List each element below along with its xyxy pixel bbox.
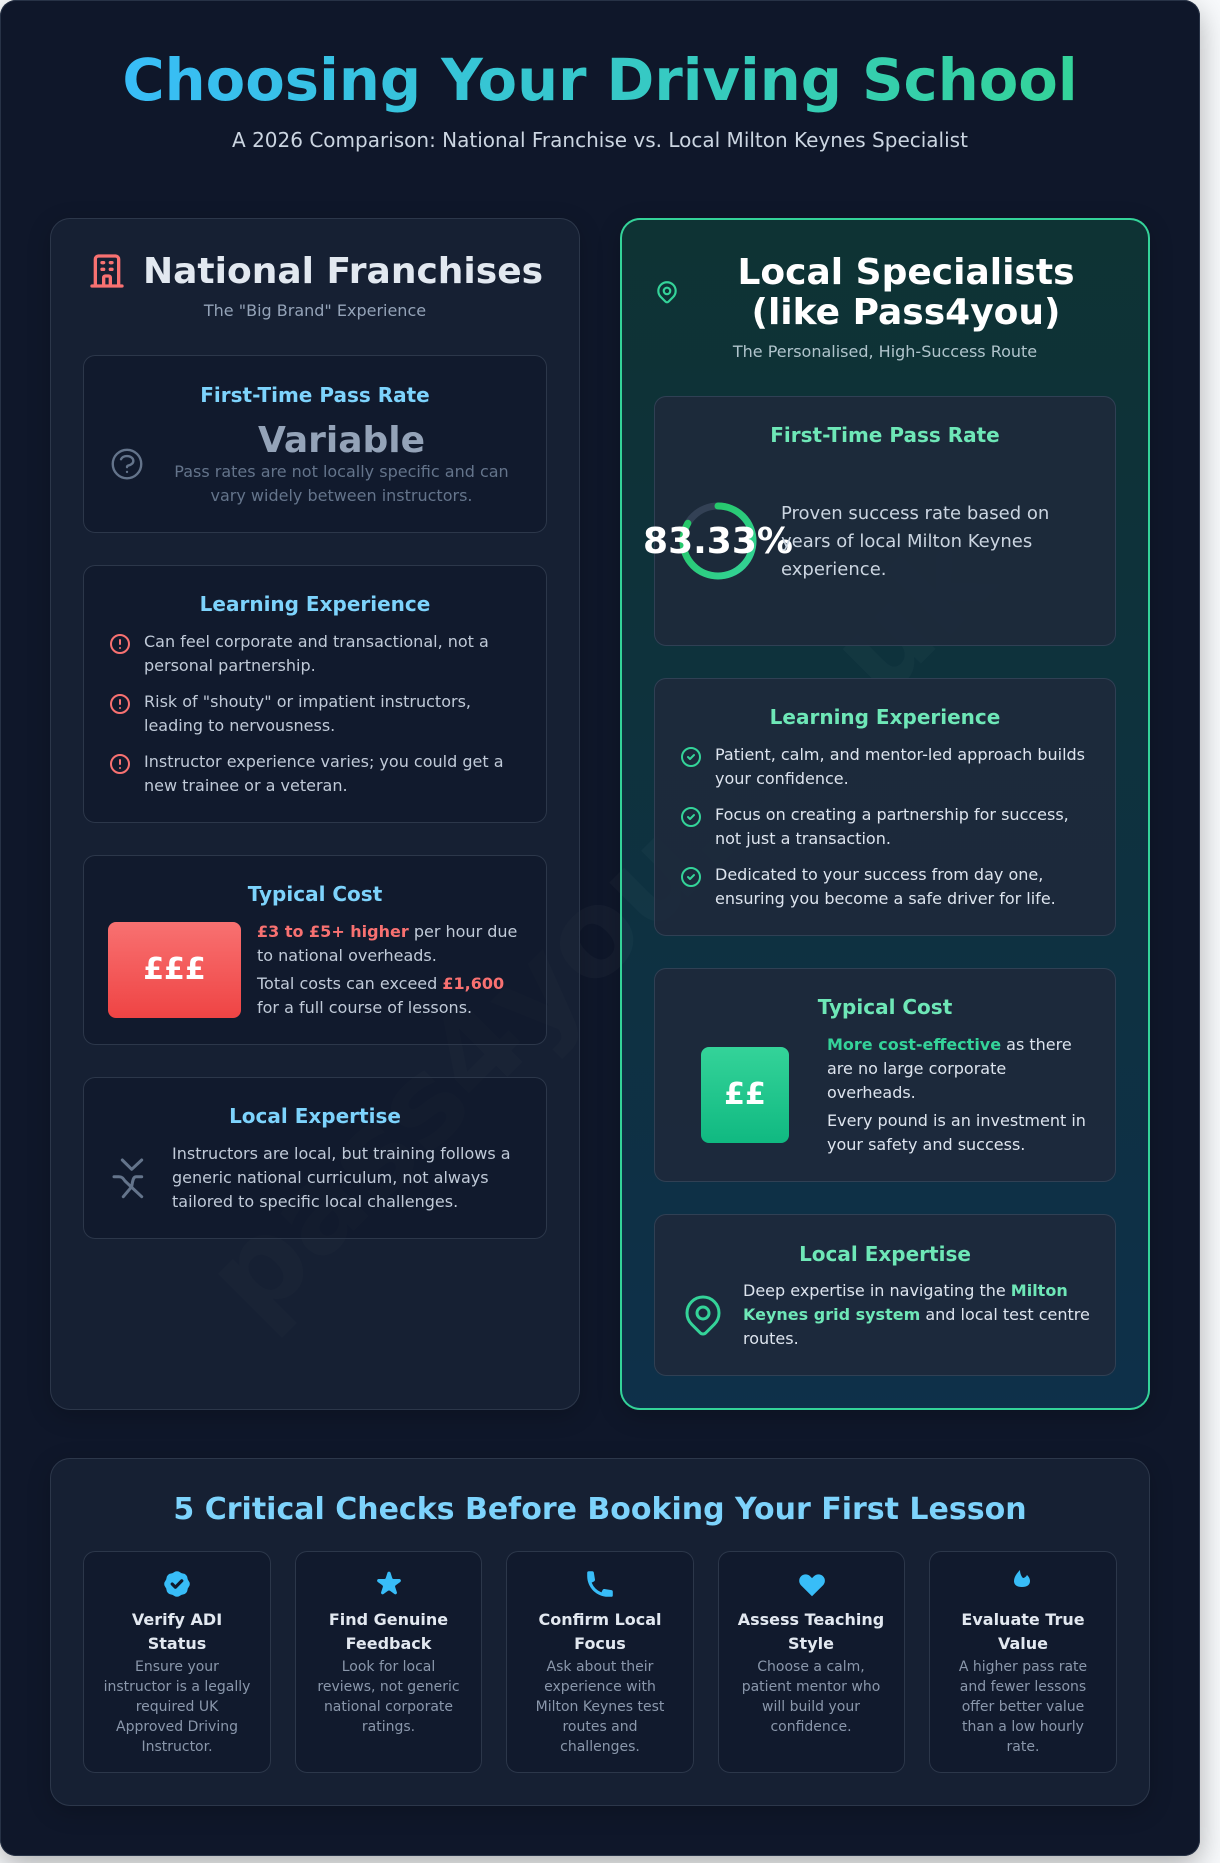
check: verify ADI status [83, 1551, 271, 1773]
point 3: Dedicated to your success from day one, [715, 865, 1043, 884]
price badge: ££ [724, 1077, 766, 1112]
point 3 [144, 752, 504, 795]
subheading: The Personalised, High-Success Route [733, 342, 1037, 360]
heading: national franchises: National Franchises [143, 251, 543, 292]
point 2: leading to nervousness. [144, 716, 335, 735]
check heading: Confirm Local [538, 1610, 662, 1628]
check text [317, 1659, 460, 1735]
icon: broken route [112, 1158, 144, 1198]
description: routes. [743, 1329, 799, 1348]
cost text 1: are no large corporate [827, 1059, 1006, 1078]
section heading: 5 Critical Checks Before Booking Your First Lesson [173, 1492, 1027, 1527]
check text: Ensure your [135, 1659, 219, 1675]
point 1 [715, 745, 1085, 788]
heading: local specialists: (like Pass4you) [752, 292, 1060, 333]
check text: rate. [1007, 1739, 1039, 1755]
check heading: Verify ADI [132, 1610, 222, 1628]
card heading: Typical Cost [818, 995, 952, 1019]
cost text 2 [256, 974, 504, 1017]
card heading: First-Time Pass Rate [200, 383, 430, 407]
card: local expertise [654, 1214, 1116, 1376]
check heading [738, 1610, 884, 1652]
icon: star [377, 1572, 401, 1594]
icon: office building [90, 254, 124, 288]
price badge: £££ [143, 952, 206, 987]
check text [104, 1659, 250, 1755]
description: Instructors are local, but training follows a [172, 1144, 511, 1163]
check text: Instructor. [141, 1739, 213, 1755]
icon: question mark [112, 448, 142, 480]
icon: warning 2 [110, 694, 130, 714]
card: first-time pass rate [83, 355, 547, 533]
point 3 [715, 865, 1056, 908]
icon: check 1 [681, 747, 701, 767]
cost text 1 [257, 922, 517, 965]
description: Keynes grid system and local test centre [743, 1305, 1090, 1324]
description: Proven success rate based on [781, 503, 1049, 524]
card heading: Learning Experience [200, 592, 430, 616]
check text [929, 1657, 1117, 1757]
watermark: pass4you.co.uk [180, 507, 1020, 1347]
description [743, 1281, 1090, 1348]
check text: experience with [544, 1679, 656, 1695]
check: assess teaching style [718, 1551, 904, 1773]
cost text 1: £3 to £5+ higher per hour due [257, 922, 517, 941]
subtitle: A 2026 Comparison: National Franchise vs. Local Milton Keynes Specialist [232, 128, 968, 152]
cost text 2: for a full course of lessons. [257, 998, 472, 1017]
heading: local specialists [737, 252, 1074, 333]
description: experience. [781, 559, 886, 580]
point 3: ensuring you become a safe driver for life. [715, 889, 1056, 908]
point 2: Focus on creating a partnership for success, [715, 805, 1069, 824]
point 1: personal partnership. [144, 656, 316, 675]
card: typical cost [83, 855, 547, 1045]
check heading [538, 1610, 662, 1652]
point 1: Can feel corporate and transactional, not a [144, 632, 489, 651]
panel: national franchises [50, 218, 580, 1410]
cost text 1 [827, 1035, 1072, 1102]
card: learning experience [654, 678, 1116, 936]
heading: local specialists: Local Specialists [737, 252, 1074, 293]
panel: local specialists [620, 218, 1150, 1410]
card heading: Local Expertise [229, 1104, 401, 1128]
check heading: Status [148, 1634, 206, 1652]
point 1: your confidence. [715, 769, 849, 788]
check: find genuine feedback [295, 1551, 482, 1773]
value: variable: Variable [258, 420, 425, 461]
card: first-time pass rate [654, 396, 1116, 646]
check text: instructor is a legally [104, 1679, 250, 1695]
check text: offer better value [962, 1699, 1084, 1715]
check text: reviews, not generic [317, 1679, 460, 1695]
check text [536, 1659, 664, 1755]
cost text 2: Total costs can exceed £1,600 [257, 974, 504, 993]
donut chart: 83.33% [680, 502, 756, 580]
check text: confidence. [770, 1719, 852, 1735]
check heading: Evaluate True [961, 1610, 1085, 1628]
price badge [108, 922, 241, 1018]
icon: phone [587, 1571, 613, 1597]
description [172, 1144, 511, 1211]
check text: Choose a calm, [757, 1659, 865, 1675]
check heading [929, 1608, 1117, 1656]
check text: Approved Driving [116, 1719, 238, 1735]
check text: Look for local [342, 1659, 435, 1675]
card: learning experience [83, 565, 547, 823]
icon: location pin [657, 281, 677, 304]
icon: check 3 [681, 867, 701, 887]
icon: badge check [164, 1571, 190, 1597]
check text: and fewer lessons [960, 1679, 1086, 1695]
cost text 1: to national overheads. [257, 946, 437, 965]
icon: check 2 [681, 807, 701, 827]
cost text 2: Every pound is an investment in [827, 1111, 1086, 1130]
card: typical cost [654, 968, 1116, 1182]
card heading: Local Expertise [799, 1242, 971, 1266]
point 1 [144, 632, 489, 675]
card heading: Learning Experience [770, 705, 1000, 729]
description [781, 503, 1049, 580]
check text: routes and [562, 1719, 638, 1735]
check text: challenges. [560, 1739, 640, 1755]
check heading [329, 1610, 448, 1652]
icon: warning 3 [110, 754, 130, 774]
check heading: Focus [574, 1634, 626, 1652]
check heading: Value [998, 1634, 1048, 1652]
check text: A higher pass rate [959, 1659, 1087, 1675]
check text: than a low hourly [962, 1719, 1084, 1735]
card heading: Typical Cost [248, 882, 382, 906]
check text: Milton Keynes test [536, 1699, 664, 1715]
description: vary widely between instructors. [210, 486, 472, 505]
check text: required UK [136, 1699, 218, 1715]
description: generic national curriculum, not always [172, 1168, 489, 1187]
check: confirm local focus [506, 1551, 694, 1773]
cost text 2 [827, 1111, 1086, 1154]
check heading: Assess Teaching [738, 1610, 884, 1628]
check heading [132, 1610, 222, 1652]
point 3: new trainee or a veteran. [144, 776, 348, 795]
check text [742, 1659, 880, 1735]
point 1: Patient, calm, and mentor-led approach builds [715, 745, 1085, 764]
cost text 1: More cost-effective as there [827, 1035, 1072, 1054]
subheading: The "Big Brand" Experience [204, 301, 426, 320]
point 2: Risk of "shouty" or impatient instructors, [144, 692, 471, 711]
card: local expertise [83, 1077, 547, 1239]
check text: will build your [762, 1699, 860, 1715]
icon: heart [799, 1574, 825, 1596]
check text: Ask about their [547, 1659, 653, 1675]
donut value: 83.33% [643, 521, 793, 562]
check text: patient mentor who [742, 1679, 880, 1695]
card heading: First-Time Pass Rate [770, 423, 1000, 447]
description: Deep expertise in navigating the Milton [743, 1281, 1068, 1300]
title: Choosing Your Driving School [122, 47, 1078, 114]
panel: five critical checks [50, 1458, 1150, 1806]
point 2 [144, 692, 471, 735]
icon: flame [1014, 1570, 1030, 1587]
check text: national corporate [324, 1699, 453, 1715]
description [174, 462, 509, 505]
icon: warning 1 [110, 634, 130, 654]
point 3: Instructor experience varies; you could get a [144, 752, 504, 771]
price badge [701, 1047, 789, 1143]
description: Pass rates are not locally specific and can [174, 462, 509, 481]
icon: location pin [686, 1296, 720, 1336]
check heading: Style [788, 1634, 834, 1652]
point 2 [715, 805, 1069, 848]
check heading: Feedback [346, 1634, 431, 1652]
check heading: Find Genuine [329, 1610, 448, 1628]
cost text 1: overheads. [827, 1083, 916, 1102]
description: years of local Milton Keynes [781, 531, 1032, 552]
point 2: not just a transaction. [715, 829, 891, 848]
check text: ratings. [362, 1719, 415, 1735]
cost text 2: your safety and success. [827, 1135, 1025, 1154]
description: tailored to specific local challenges. [172, 1192, 458, 1211]
check: evaluate true value [929, 1551, 1117, 1773]
